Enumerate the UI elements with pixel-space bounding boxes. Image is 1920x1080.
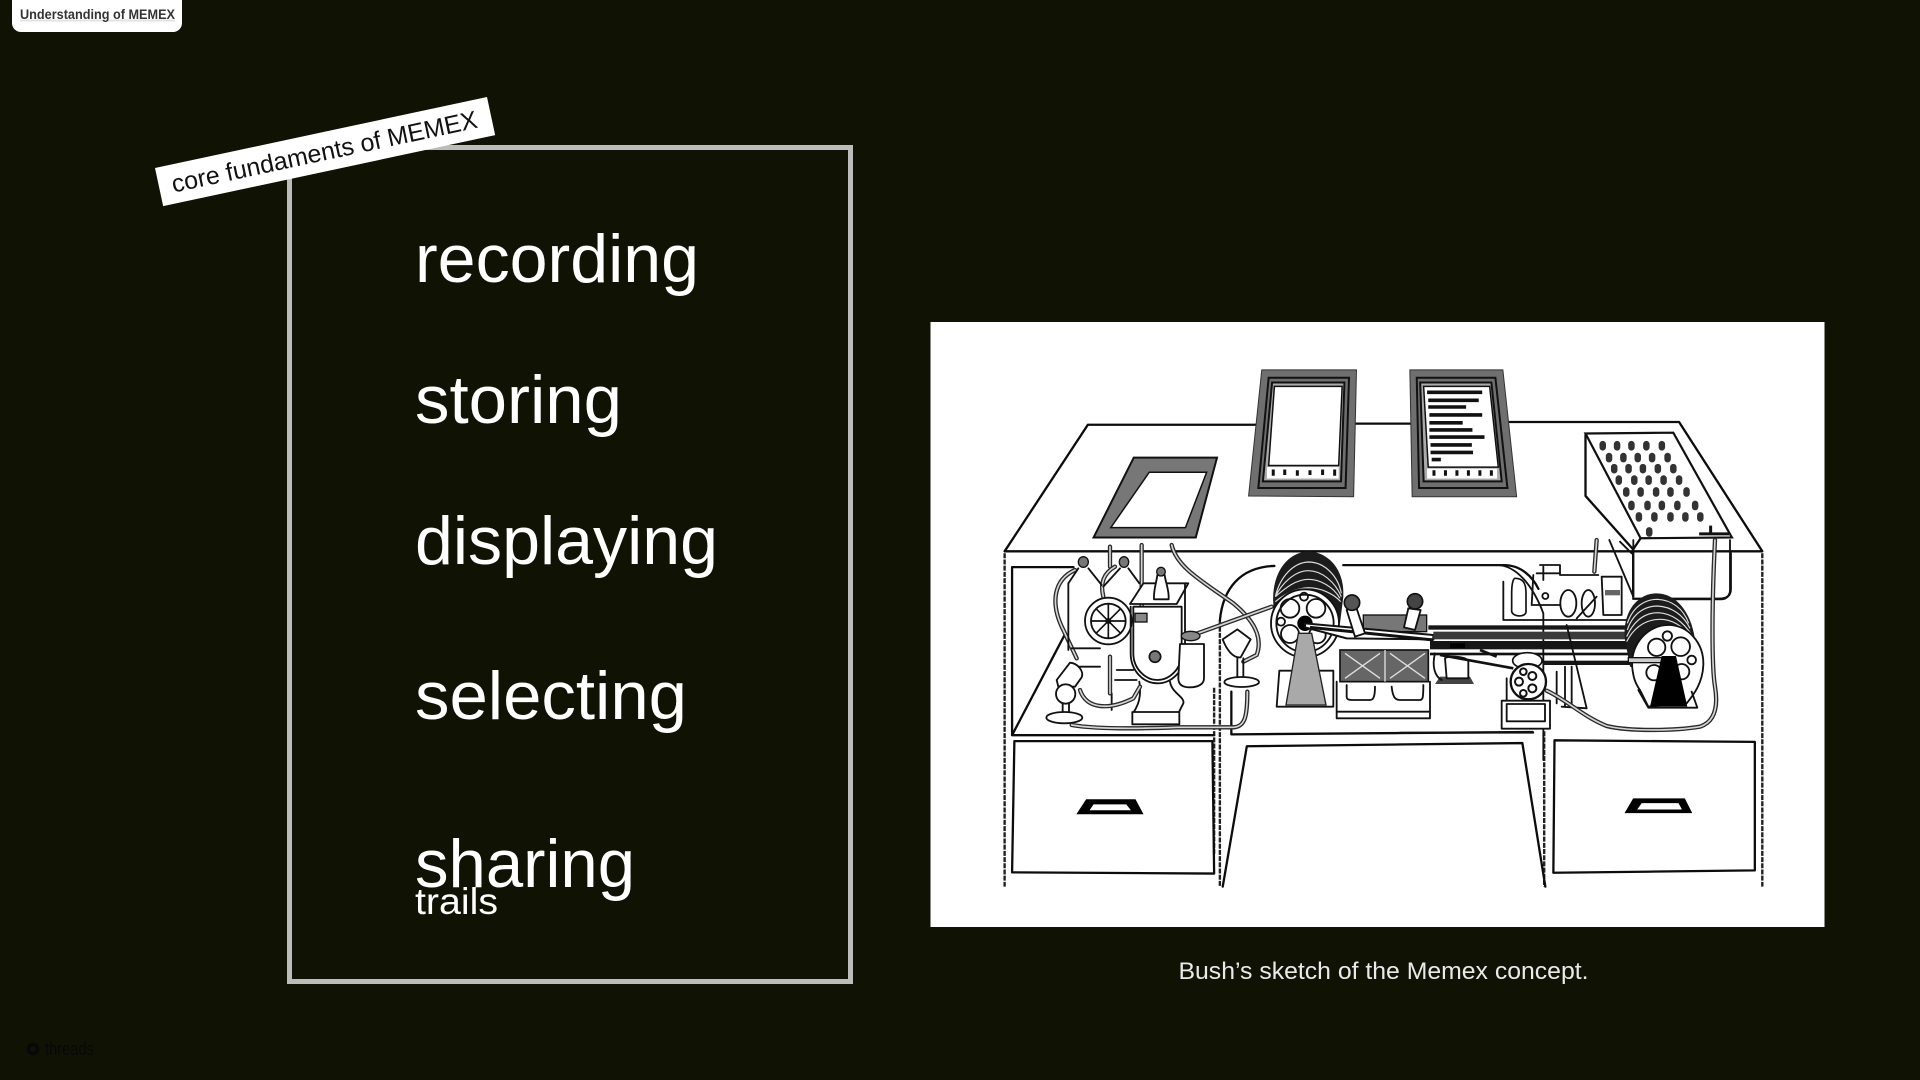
header tag: Understanding of MEMEX: Understanding of MEMEX [20,6,176,22]
list item: displaying: displaying [415,503,718,579]
left machine: bottles, wheel and lamp [1046,545,1272,728]
header tag: Understanding of MEMEX [12,0,182,32]
cylinder and reel feed tube [1178,644,1204,687]
left screen [1094,458,1217,537]
left drawer [1012,741,1214,874]
bottles [1068,568,1139,650]
small roller [1502,653,1550,729]
right assembly: rods, roller, apparatus and reel [1400,540,1730,760]
lower hoses [1080,657,1140,706]
main capsule [1133,607,1182,680]
lamps [1223,629,1251,657]
right drawer handle [1625,798,1692,813]
rods [1428,625,1663,708]
hoses from left screen [1172,545,1259,662]
stand [1112,682,1183,713]
watermark: threads: threads [45,1039,94,1059]
caption: Bush’s sketch of the Memex concept. [1178,958,1588,985]
center screen [1249,370,1356,497]
right drawer [1553,740,1755,873]
right screen with text [1410,370,1517,497]
list item: storing: storing [415,362,622,438]
reel stand [1277,671,1333,707]
watermark: threads [28,1039,94,1059]
panel: core fundamentals list [290,148,850,982]
center controls: levers and plate [1305,594,1474,718]
reel front disc [1271,589,1339,657]
list item: trails: trails [415,881,498,922]
right reel [1625,593,1703,708]
list item: selecting: selecting [415,658,687,734]
desk top and frame [1005,422,1762,551]
top apparatus [1400,540,1730,760]
keyboard [1586,433,1732,599]
reel stack [1273,552,1343,623]
lever knobs [1347,607,1365,637]
control plate [1363,615,1427,632]
list item: recording: recording [415,221,699,297]
tray with small bottle [1130,583,1188,604]
cable to right reel [1547,540,1716,730]
panel frame [290,148,850,982]
lever bar [1305,623,1433,639]
illustration: Bush's sketch of the Memex desk [930,322,1824,927]
desk structure [1005,422,1762,887]
small device [1435,677,1474,684]
left film reel and stand [1271,552,1343,707]
rotated label: core fundaments of MEMEX: core fundaments of MEMEX [169,106,480,199]
wheel [1085,598,1132,644]
list item: sharing: sharing [415,826,635,902]
left drawer handle [1076,799,1144,814]
screens and keyboard [1094,370,1732,599]
